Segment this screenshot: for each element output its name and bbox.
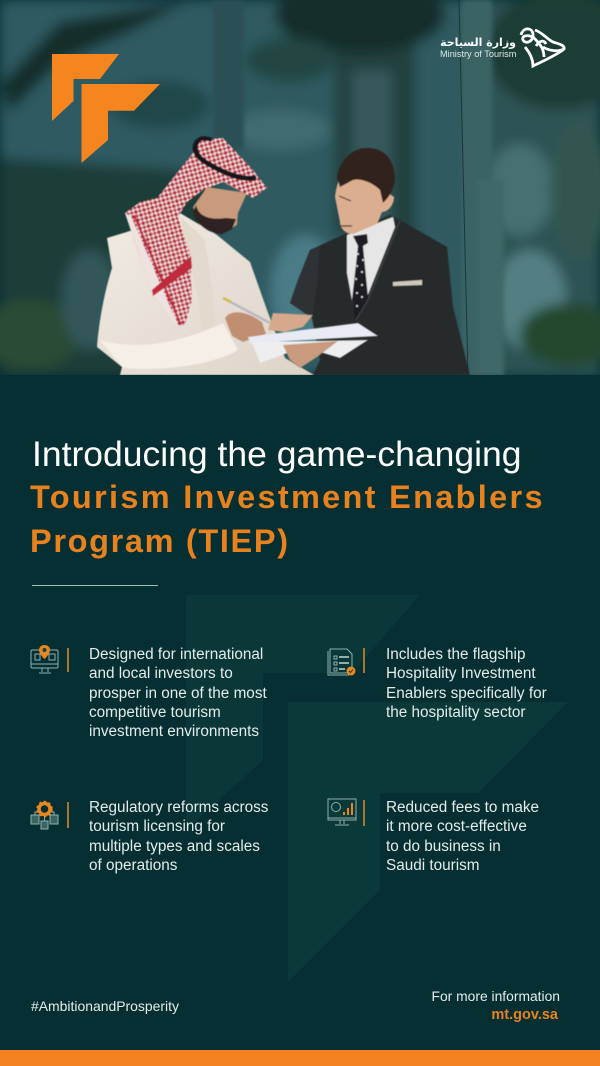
title orange lines: Tourism Investment Enablers: [30, 479, 545, 515]
icon: checklist document: [328, 648, 356, 676]
feature text: Designed for international: [89, 646, 263, 663]
feature text: competitive tourism: [89, 704, 221, 721]
background watermark logo: [288, 702, 568, 982]
photo background: [0, 0, 600, 376]
logo mark: [52, 54, 160, 163]
feature text: the hospitality sector: [386, 704, 525, 721]
feature text: tourism licensing for: [89, 818, 225, 835]
english ministry name: Ministry of Tourism: [440, 49, 516, 59]
divider: [363, 648, 364, 673]
feature text: Includes the flagship: [386, 646, 525, 663]
feature text: it more cost-effective: [386, 818, 527, 835]
website: mt.gov.sa: [491, 1007, 558, 1023]
feature text: Enablers specifically for: [386, 684, 547, 702]
heading divider: [32, 585, 158, 586]
icon: monitor with chart: [328, 798, 356, 826]
hashtag: #AmbitionandProsperity: [31, 998, 179, 1014]
feature text: Regulatory reforms across: [89, 799, 268, 816]
bottom orange bar: [0, 1050, 600, 1066]
divider: [67, 648, 68, 672]
feature: regulatory reforms: [30, 799, 268, 874]
icon: gear and network: [30, 800, 58, 830]
feature: reduced fees: [328, 798, 539, 874]
arabic ministry name: وزارة السياحة: [440, 36, 516, 49]
ministry emblem: [520, 28, 566, 68]
feature text: [386, 646, 547, 721]
feature text: Reduced fees to make: [386, 799, 539, 816]
man in thobe: [97, 138, 314, 375]
title white line: Introducing the game-changing: [32, 434, 521, 474]
feature text: investment environments: [89, 723, 259, 740]
man in suit: [290, 148, 470, 375]
hero photo: [0, 0, 600, 375]
feature text: [386, 799, 539, 874]
feature: international investors: [30, 645, 267, 740]
contact label: For more information: [432, 988, 560, 1004]
feature: hospitality enablers: [328, 646, 547, 721]
feature text: Saudi tourism: [386, 857, 480, 874]
ministry of tourism logo: [440, 28, 566, 68]
content panel: [0, 375, 600, 1050]
feature text: prosper in one of the most: [89, 684, 267, 702]
feature text: of operations: [89, 857, 177, 874]
divider: [67, 802, 68, 828]
divider: [363, 800, 364, 826]
icon: monitor with map pin: [30, 645, 58, 674]
feature text: and local investors to: [89, 665, 233, 682]
feature text: Hospitality Investment: [386, 665, 536, 682]
contact info: [432, 988, 560, 1023]
feature text: [89, 646, 267, 740]
title: [30, 434, 545, 559]
feature text: to do business in: [386, 838, 501, 854]
title orange lines: [30, 479, 545, 559]
documents held by the men: [248, 313, 378, 368]
feature text: [89, 799, 268, 874]
feature text: multiple types and scales: [89, 838, 260, 854]
title orange lines: Program (TIEP): [30, 523, 290, 559]
